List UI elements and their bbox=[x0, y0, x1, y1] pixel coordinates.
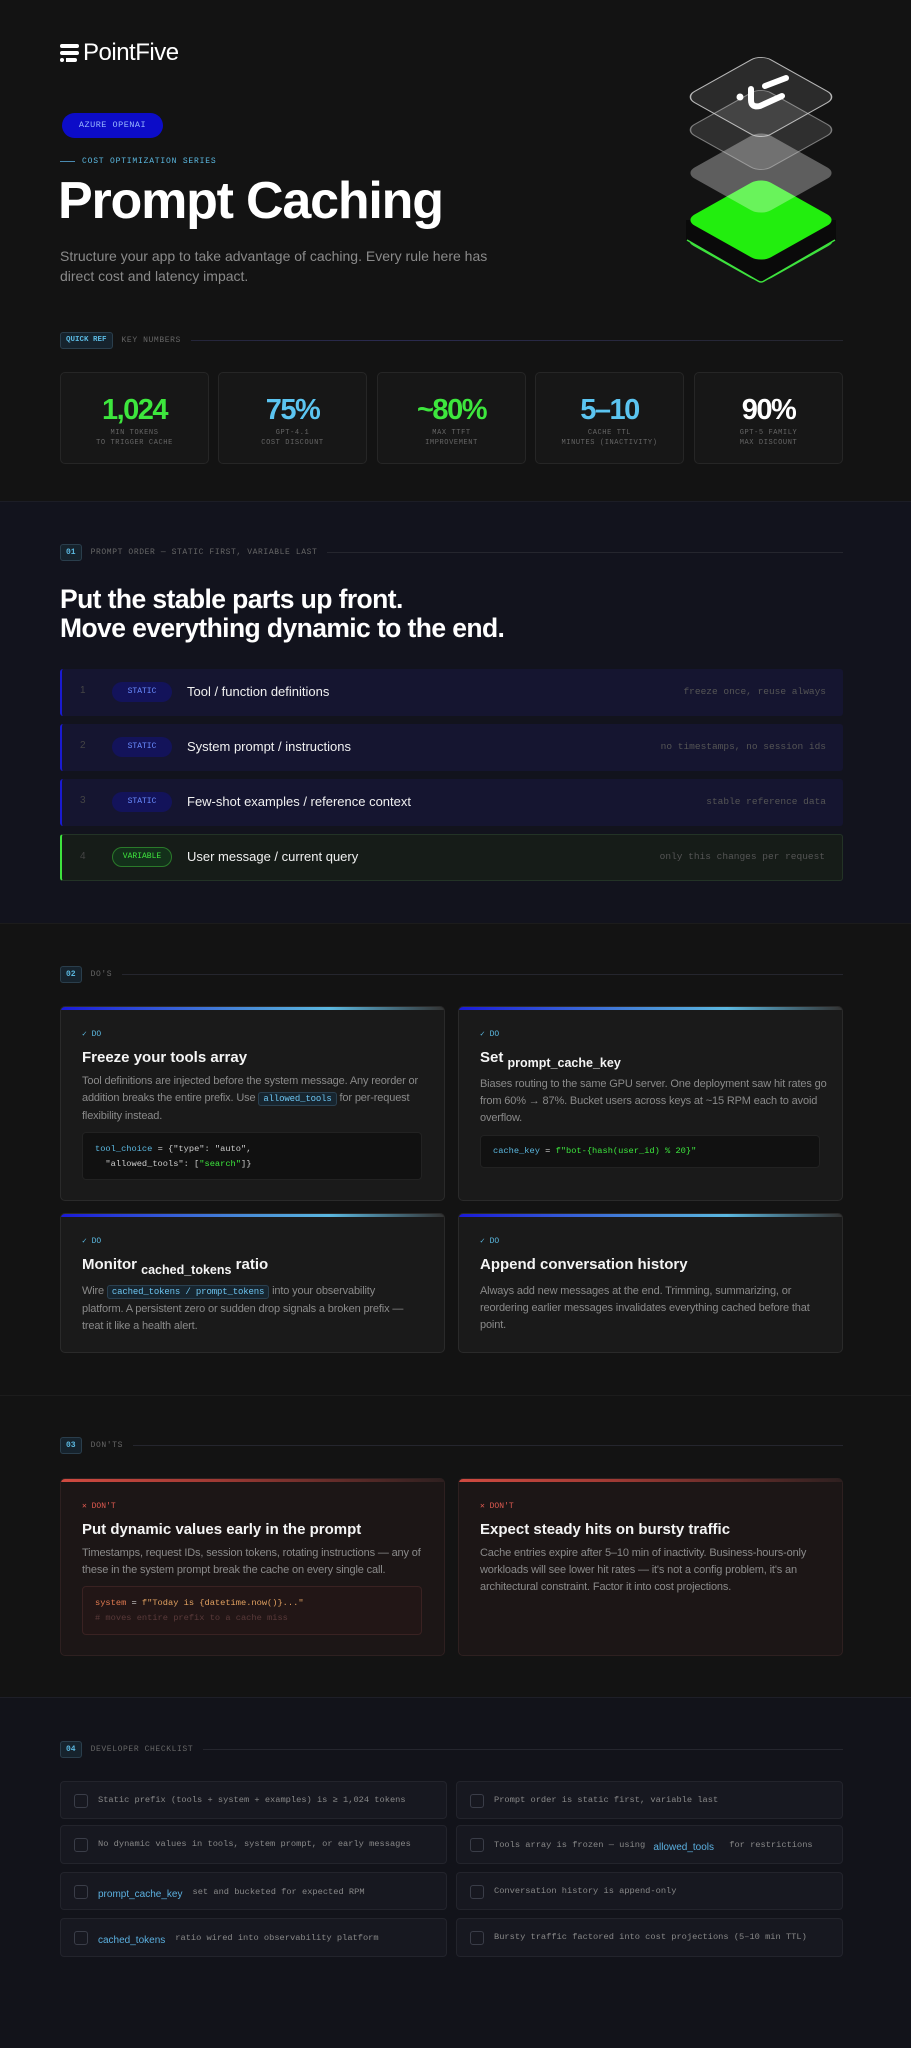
checklist item 3: No dynamic values in tools, system prompt, or early messages bbox=[98, 1839, 411, 1849]
card: freeze tools bbox=[60, 1006, 445, 1201]
card: freeze tools: Freeze your tools array bbox=[82, 1049, 247, 1066]
card: monitor cached_tokens: Monitor cached_tokens ratio bbox=[82, 1256, 268, 1277]
section label 01 bbox=[60, 544, 843, 561]
card: dynamic values early bbox=[60, 1478, 445, 1656]
checklist item 1: Static prefix (tools + system + examples) is ≥ 1,024 tokens bbox=[98, 1795, 406, 1805]
stat: 75%: 75% bbox=[266, 394, 319, 426]
checklist item 6: Conversation history is append-only bbox=[494, 1886, 676, 1896]
row 4 variable: VARIABLE bbox=[123, 852, 161, 861]
row 4 variable: 4 bbox=[80, 851, 86, 862]
card: freeze tools: ✓ DO bbox=[82, 1030, 101, 1039]
card: dynamic values early: these in the system prompt break the cache on every single call. bbox=[82, 1564, 385, 1576]
card: monitor cached_tokens: treat it like a health alert. bbox=[82, 1320, 198, 1332]
section label 03: DON'TS bbox=[91, 1441, 123, 1450]
top glass layer with logo bbox=[685, 54, 837, 140]
card: prompt_cache_key: cache_key = f"bot-{hash(user_id) % 20}" bbox=[493, 1146, 696, 1156]
section label 01: PROMPT ORDER — STATIC FIRST, VARIABLE LAST bbox=[91, 548, 317, 557]
card: prompt_cache_key: Set prompt_cache_key bbox=[480, 1049, 621, 1070]
checklist item 4 bbox=[456, 1825, 843, 1864]
card: dynamic values early: system = f"Today is {datetime.now()}..." # moves entire prefix to a cache miss bbox=[95, 1598, 304, 1623]
heading bbox=[60, 584, 504, 643]
stat: 1,024: TO TRIGGER CACHE bbox=[96, 439, 173, 447]
card: monitor cached_tokens: platform. A persistent zero or sudden drop signals a broken prefix — bbox=[82, 1303, 403, 1315]
stat: 75% bbox=[218, 372, 367, 464]
panel: 02 do's bbox=[0, 923, 911, 1395]
stat: ~80% bbox=[377, 372, 526, 464]
row 1: 1 bbox=[80, 685, 86, 696]
row 3 bbox=[60, 779, 843, 826]
green base layer bbox=[685, 177, 837, 283]
row 1: STATIC bbox=[128, 687, 156, 696]
quick ref label: KEY NUMBERS bbox=[122, 336, 181, 345]
card: freeze tools: tool_choice = {"type": "auto", "allowed_tools": ["search"]} bbox=[95, 1144, 251, 1169]
header section background bbox=[0, 0, 911, 501]
card: append history: ✓ DO bbox=[480, 1237, 499, 1246]
icon: stacked cache layers bbox=[686, 57, 836, 283]
subtitle: Structure your app to take advantage of caching. Every rule here has bbox=[60, 248, 487, 264]
subtitle: direct cost and latency impact. bbox=[60, 268, 248, 284]
checklist item 8 bbox=[456, 1918, 843, 1957]
quick ref label bbox=[60, 332, 843, 349]
stat: 90%: GPT-5 FAMILY bbox=[740, 429, 797, 437]
card: bursty traffic: Cache entries expire after 5–10 min of inactivity. Business-hours-only bbox=[480, 1547, 806, 1559]
checklist item 7 bbox=[60, 1918, 447, 1957]
stat: ~80%: MAX TTFT bbox=[432, 429, 471, 437]
section label 04: DEVELOPER CHECKLIST bbox=[91, 1745, 193, 1754]
heading: Move everything dynamic to the end. bbox=[60, 613, 504, 643]
stat: 5-10: CACHE TTL bbox=[588, 429, 631, 437]
logo: PointFive bbox=[83, 39, 179, 66]
card: freeze tools: addition breaks the entire prefix. Use allowed_tools for per-request bbox=[82, 1092, 409, 1104]
row 2 bbox=[60, 724, 843, 771]
eyebrow: cost optimization series: COST OPTIMIZATION SERIES bbox=[82, 157, 216, 166]
panel: 03 don'ts bbox=[0, 1395, 911, 1697]
section label 04 bbox=[60, 1741, 843, 1758]
quick ref label: QUICK REF bbox=[66, 336, 107, 344]
row 2: no timestamps, no session ids bbox=[661, 741, 826, 752]
card: monitor cached_tokens: Wire cached_tokens / prompt_tokens into your observability bbox=[82, 1285, 375, 1297]
stat: 5-10 bbox=[535, 372, 684, 464]
row 4 variable bbox=[60, 834, 843, 881]
subtitle bbox=[60, 248, 487, 284]
stat: ~80%: IMPROVEMENT bbox=[425, 439, 478, 447]
stat: 1,024: 1,024 bbox=[102, 394, 167, 426]
checklist item 4: Tools array is frozen — using allowed_tools for restrictions bbox=[494, 1840, 813, 1853]
section label 04: 04 bbox=[66, 1745, 76, 1754]
row 2: 2 bbox=[80, 740, 86, 751]
panel: 01 prompt order bbox=[0, 501, 911, 923]
checklist item 8: Bursty traffic factored into cost projections (5–10 min TTL) bbox=[494, 1932, 807, 1942]
row 3: Few-shot examples / reference context bbox=[187, 794, 411, 809]
card: prompt_cache_key: overflow. bbox=[480, 1112, 522, 1124]
row 3: STATIC bbox=[128, 797, 156, 806]
checklist item 5: prompt_cache_key set and bucketed for expected RPM bbox=[98, 1887, 365, 1900]
stat cards bbox=[60, 372, 843, 464]
stat: 90%: 90% bbox=[742, 394, 795, 426]
checklist item 2: Prompt order is static first, variable last bbox=[494, 1795, 718, 1805]
stat: ~80%: ~80% bbox=[417, 394, 486, 426]
card: bursty traffic: architectural constraint. Factor it into cost projections. bbox=[480, 1581, 731, 1593]
card: append history: Always add new messages at the end. Trimming, summarizing, or bbox=[480, 1285, 791, 1297]
card: bursty traffic: Expect steady hits on bursty traffic bbox=[480, 1521, 730, 1538]
checklist item 3 bbox=[60, 1825, 447, 1864]
stat: 90% bbox=[694, 372, 843, 464]
row 2: System prompt / instructions bbox=[187, 739, 351, 754]
checklist item 6 bbox=[456, 1872, 843, 1910]
card: append history: point. bbox=[480, 1319, 506, 1331]
heading: Put the stable parts up front. bbox=[60, 584, 403, 614]
card: bursty traffic: ✕ DON'T bbox=[480, 1502, 514, 1511]
card: prompt_cache_key: from 60% → 87%. Bucket users across keys at ~15 RPM each to avoid bbox=[480, 1095, 817, 1107]
card: prompt_cache_key: ✓ DO bbox=[480, 1030, 499, 1039]
card: prompt_cache_key bbox=[458, 1006, 843, 1201]
row 3: 3 bbox=[80, 795, 86, 806]
checklist item 1 bbox=[60, 1781, 447, 1819]
card: dynamic values early: Put dynamic values early in the prompt bbox=[82, 1521, 361, 1538]
badge: azure openai bbox=[62, 113, 163, 138]
row 1 bbox=[60, 669, 843, 716]
badge: azure openai: AZURE OPENAI bbox=[79, 120, 146, 130]
stat: 5-10: 5–10 bbox=[580, 394, 639, 426]
card: dynamic values early: Timestamps, request IDs, session tokens, rotating instructions — any of bbox=[82, 1547, 421, 1559]
section label 03 bbox=[60, 1437, 843, 1454]
section label 02: 02 bbox=[66, 970, 76, 979]
title: Prompt Caching bbox=[58, 172, 443, 230]
stat: 1,024: MIN TOKENS bbox=[110, 429, 158, 437]
row 1: freeze once, reuse always bbox=[683, 686, 826, 697]
card: bursty traffic: workloads will see lower hit rates — it's not a config problem, it's an bbox=[480, 1564, 797, 1576]
stat: 5-10: MINUTES (INACTIVITY) bbox=[561, 439, 658, 447]
stat: 90%: MAX DISCOUNT bbox=[740, 439, 797, 447]
row 2: STATIC bbox=[128, 742, 156, 751]
row 1: Tool / function definitions bbox=[187, 684, 329, 699]
card: monitor cached_tokens: ✓ DO bbox=[82, 1237, 101, 1246]
card: freeze tools: flexibility instead. bbox=[82, 1110, 162, 1122]
section label 01: 01 bbox=[66, 548, 76, 557]
section label 02: DO'S bbox=[91, 970, 112, 979]
stat: 75%: COST DISCOUNT bbox=[261, 439, 324, 447]
row 3: stable reference data bbox=[706, 796, 826, 807]
card: append history: reordering earlier messages invalidates everything cached before that bbox=[480, 1302, 810, 1314]
row 4 variable: only this changes per request bbox=[660, 851, 825, 862]
gray layer bbox=[685, 130, 837, 216]
stat: 75%: GPT-4.1 bbox=[276, 429, 309, 437]
stat: 1,024 bbox=[60, 372, 209, 464]
checklist item 7: cached_tokens ratio wired into observability platform bbox=[98, 1933, 379, 1946]
section label 03: 03 bbox=[66, 1441, 76, 1450]
card: monitor cached_tokens bbox=[60, 1213, 445, 1353]
panel: 04 developer checklist bbox=[0, 1697, 911, 2048]
card: bursty traffic bbox=[458, 1478, 843, 1656]
glass layer bbox=[685, 87, 837, 173]
card: freeze tools: Tool definitions are injected before the system message. Any reorder or bbox=[82, 1075, 418, 1087]
row 4 variable: User message / current query bbox=[187, 849, 358, 864]
checklist item 2 bbox=[456, 1781, 843, 1819]
card: append history bbox=[458, 1213, 843, 1353]
section label 02 bbox=[60, 966, 843, 983]
card: dynamic values early: ✕ DON'T bbox=[82, 1502, 116, 1511]
checklist item 5 bbox=[60, 1872, 447, 1910]
card: prompt_cache_key: Biases routing to the same GPU server. One deployment saw hit rates go bbox=[480, 1078, 827, 1090]
card: append history: Append conversation history bbox=[480, 1256, 688, 1273]
